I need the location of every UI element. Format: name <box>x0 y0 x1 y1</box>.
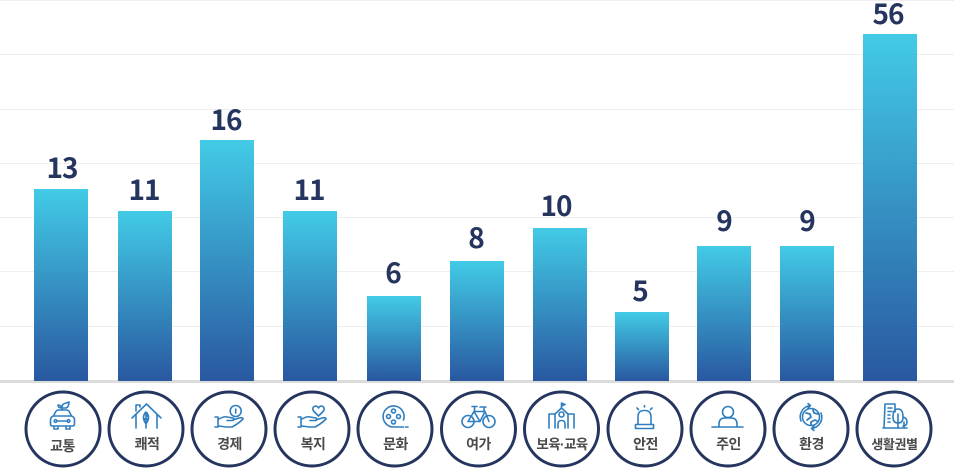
bar: 환경 9 <box>780 200 834 381</box>
bar: 보육·교육 10 <box>533 185 587 381</box>
bar: 주인 9 <box>697 200 751 381</box>
category: 교통 <box>26 392 100 466</box>
icon: hand with coin <box>215 406 243 427</box>
icon: car with leaf <box>50 402 74 429</box>
bar: 쾌적 11: 11 <box>128 169 160 209</box>
icon: bicycle <box>462 406 495 428</box>
label: 생활권별 <box>871 437 918 452</box>
bar: 교통 13 <box>34 147 88 381</box>
category: 경제 <box>192 392 266 466</box>
icon: house with leaf <box>132 404 161 428</box>
icon: film reel <box>383 406 408 427</box>
label: 복지 <box>301 436 325 452</box>
icon: earth with arrows <box>800 404 822 430</box>
label: 교통 <box>50 438 75 454</box>
label: 쾌적 <box>135 436 159 452</box>
category: 여가 <box>442 392 516 466</box>
bar: 주인 9: 9 <box>716 200 732 240</box>
category: 환경 <box>774 392 848 466</box>
bar: 안전 5 <box>615 270 669 381</box>
category: 안전 <box>608 392 682 466</box>
bar: 생활권별 56 <box>863 0 917 381</box>
icon: person <box>712 406 743 427</box>
bar: 보육·교육 10: 10 <box>540 185 572 225</box>
label: 경제 <box>217 436 242 452</box>
category: 보육·교육 <box>524 392 598 466</box>
bar: 경제 16 <box>200 99 254 381</box>
icon: school building <box>549 403 574 428</box>
icon: hand with heart <box>298 406 326 427</box>
bar: 교통 13: 13 <box>46 147 78 187</box>
icon: siren <box>636 406 654 428</box>
category: 문화 <box>358 392 432 466</box>
bar: 여가 8: 8 <box>468 217 484 257</box>
category: 주인 <box>691 392 765 466</box>
bar: 안전 5: 5 <box>632 270 648 310</box>
bar: 경제 16: 16 <box>210 99 242 139</box>
category: 쾌적 <box>109 392 183 466</box>
label: 보육·교육 <box>536 437 588 452</box>
bar chart <box>34 0 917 381</box>
bar: 문화 6: 6 <box>385 252 401 292</box>
bar: 환경 9: 9 <box>799 200 815 240</box>
bar: 여가 8 <box>450 217 504 381</box>
label: 여가 <box>466 436 491 452</box>
bar: 문화 6 <box>367 252 421 381</box>
label: 문화 <box>383 436 408 452</box>
bar: 복지 11: 11 <box>293 169 325 209</box>
category: 생활권별 <box>857 392 931 466</box>
icon: building and trees <box>883 404 907 428</box>
category: 복지 <box>275 392 349 466</box>
bar: 복지 11 <box>283 169 337 381</box>
label: 안전 <box>633 436 658 452</box>
bar: 쾌적 11 <box>118 169 172 381</box>
label: 주인 <box>716 436 741 452</box>
label: 환경 <box>799 436 824 452</box>
